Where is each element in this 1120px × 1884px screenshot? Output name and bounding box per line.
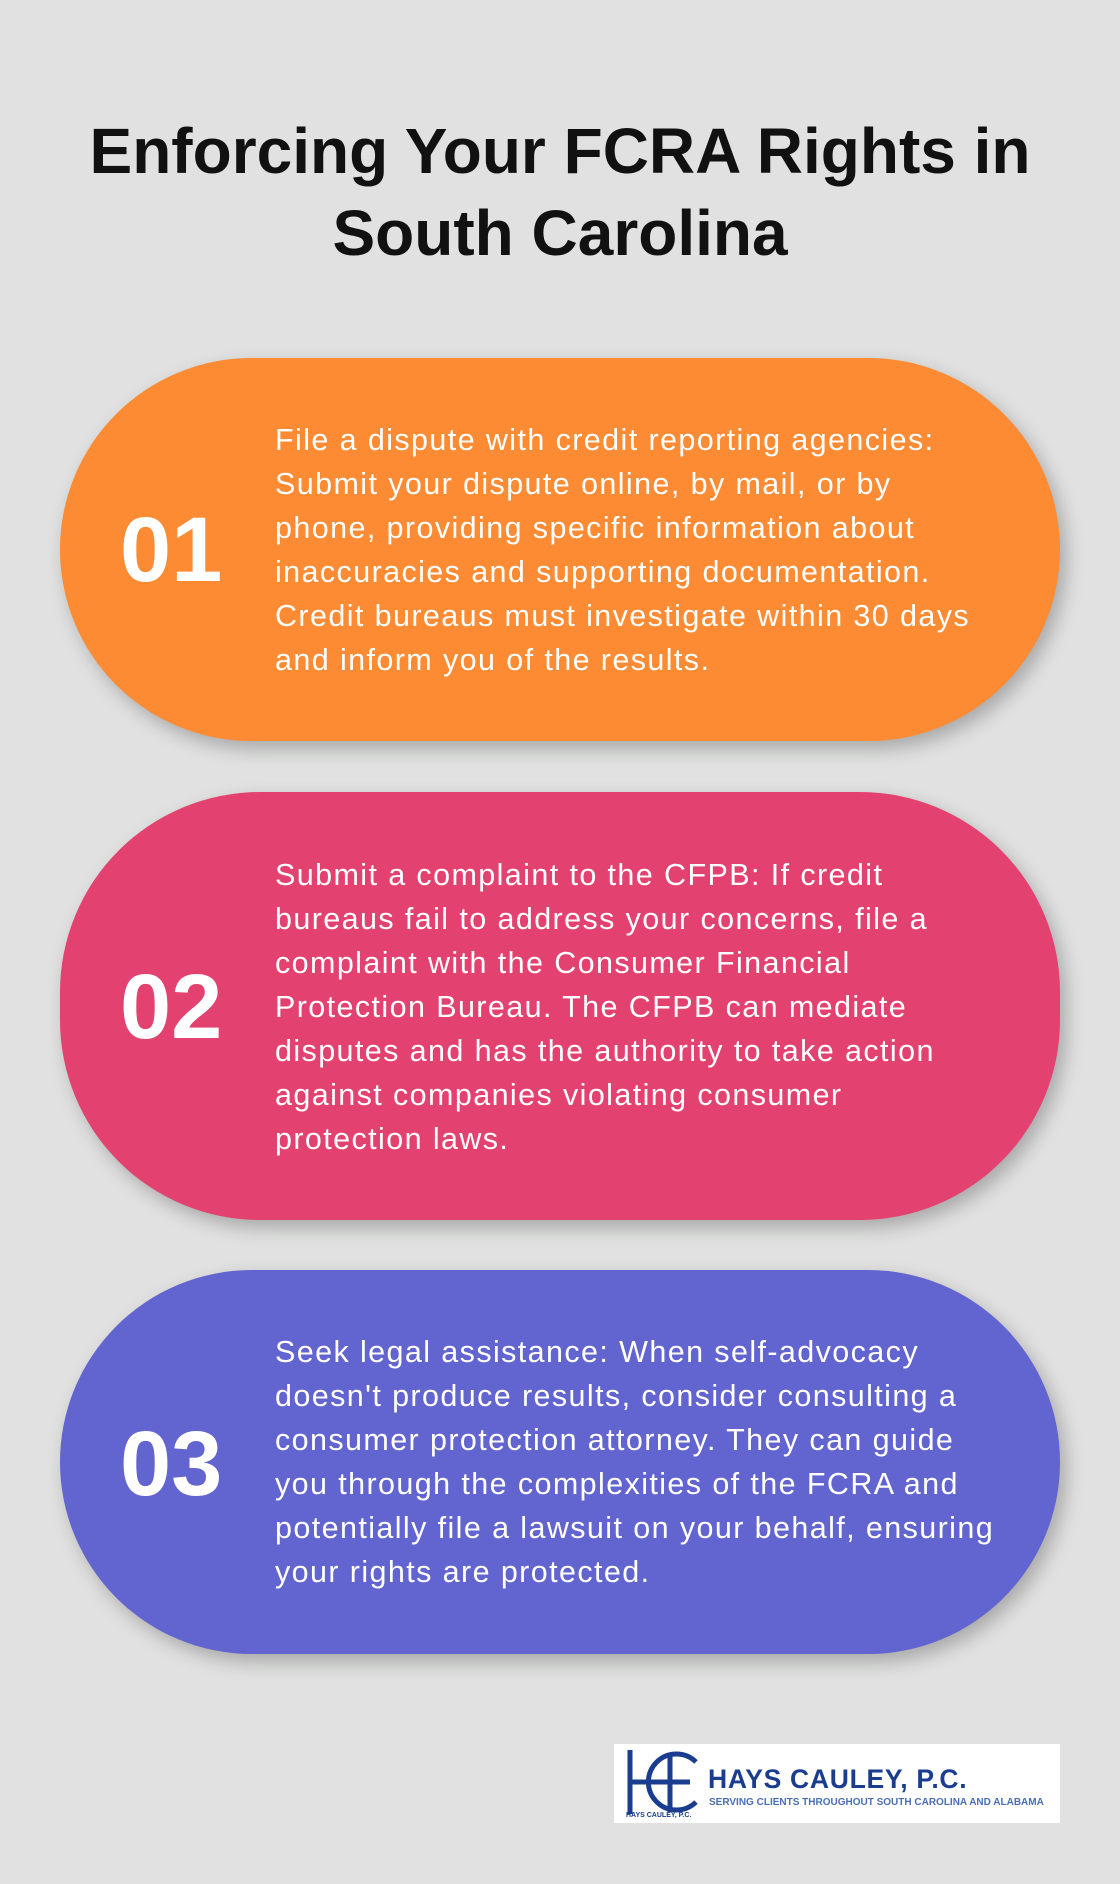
text 01: phone, providing specific information about [275, 511, 915, 545]
logo name: HAYS CAULEY, P.C. [708, 1764, 967, 1794]
logo tagline: SERVING CLIENTS THROUGHOUT SOUTH CAROLINA AND ALABAMA [709, 1797, 1044, 1808]
text 01: inaccuracies and supporting documentation. [275, 555, 931, 589]
text 02: against companies violating consumer [275, 1078, 842, 1112]
panel: step 01 [60, 358, 1060, 741]
text 03 [275, 1335, 994, 1589]
text 03: your rights are protected. [275, 1555, 650, 1589]
number 03: 03 [120, 1413, 222, 1515]
text 01: and inform you of the results. [275, 643, 710, 677]
text 01: Credit bureaus must investigate within 30 days [275, 599, 970, 633]
text 03: Seek legal assistance: When self-advocacy [275, 1335, 919, 1369]
number 01: 01 [120, 499, 222, 601]
text 03: you through the complexities of the FCRA and [275, 1467, 959, 1501]
logo [614, 1744, 1060, 1823]
title: Enforcing Your FCRA Rights in [90, 115, 1030, 187]
title [90, 115, 1030, 269]
text 02: complaint with the Consumer Financial [275, 946, 851, 980]
logo: HAYS CAULEY, P.C. [626, 1812, 691, 1819]
text 02: Submit a complaint to the CFPB: If credit [275, 858, 883, 892]
title: South Carolina [332, 197, 788, 269]
logo mark [628, 1750, 698, 1814]
text 03: consumer protection attorney. They can guide [275, 1423, 954, 1457]
text 02: bureaus fail to address your concerns, file a [275, 902, 928, 936]
text 03: doesn't produce results, consider consulting a [275, 1379, 957, 1413]
text 01: File a dispute with credit reporting agencies: [275, 423, 934, 457]
number 02: 02 [120, 956, 222, 1058]
text 02: disputes and has the authority to take action [275, 1034, 935, 1068]
panel: step 03 [60, 1270, 1060, 1654]
text 02 [275, 858, 935, 1156]
text 01 [275, 423, 970, 677]
text 01: Submit your dispute online, by mail, or by [275, 467, 892, 501]
panel: step 02 [60, 792, 1060, 1220]
text 02: Protection Bureau. The CFPB can mediate [275, 990, 907, 1024]
text 02: protection laws. [275, 1122, 509, 1156]
text 03: potentially file a lawsuit on your behalf, ensuring [275, 1511, 994, 1545]
